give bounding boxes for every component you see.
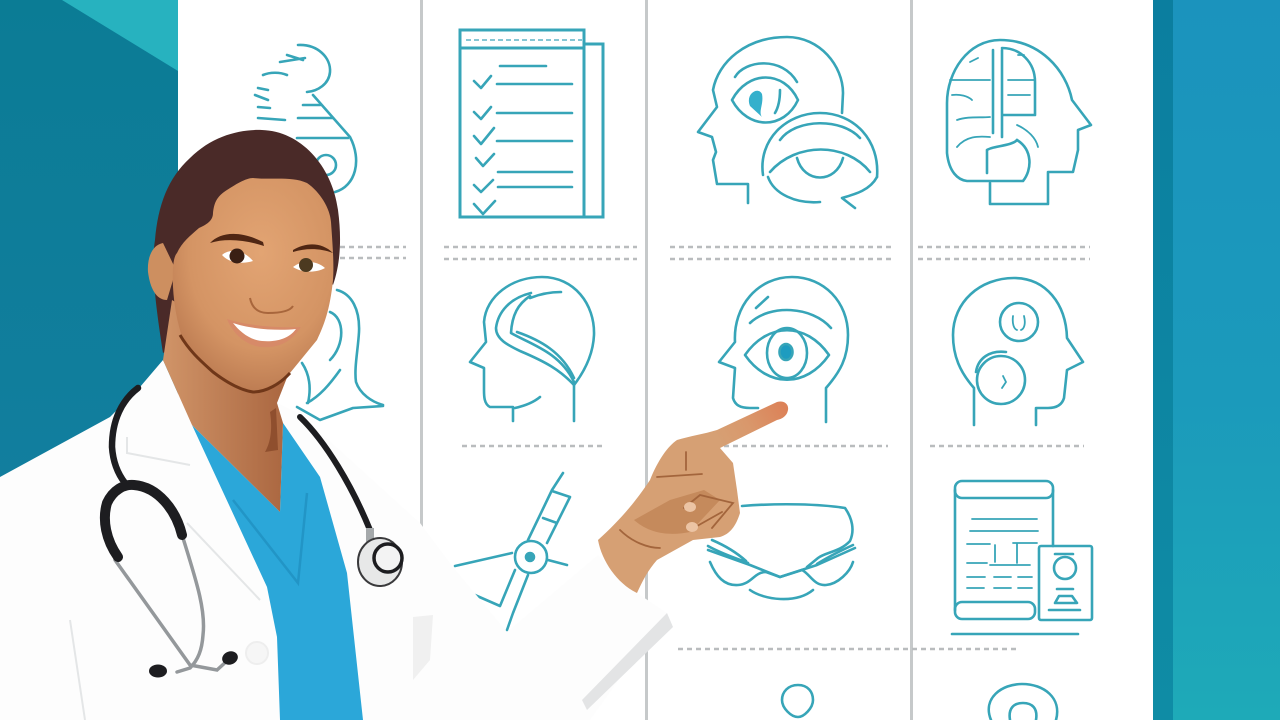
stethoscope tubing [105, 388, 370, 672]
smile [227, 319, 301, 347]
white coat [0, 360, 667, 720]
coat shading [70, 437, 268, 720]
right background panel [1153, 0, 1280, 720]
icon: head with brain cross-section [947, 40, 1091, 204]
neck [163, 300, 290, 512]
doctor illustration [0, 130, 788, 720]
eyes [222, 251, 325, 272]
white chart board [178, 0, 1153, 720]
icon: head profile with hair, behind doctor [297, 290, 383, 420]
hair [153, 130, 340, 353]
eyebrows [210, 234, 333, 253]
hand pointing [598, 401, 788, 593]
neck shadow [265, 408, 278, 452]
icon: checklist document [460, 30, 603, 217]
fingernails [684, 502, 698, 532]
sleeve shadow [413, 615, 433, 680]
icon: partial head circle, bottom centre [782, 685, 813, 717]
scrubs top [192, 423, 363, 720]
icon: head with swirl, top left [255, 45, 356, 192]
sleeve fold [582, 613, 673, 710]
stethoscope chestpiece [358, 528, 402, 586]
icon: report and id card [952, 481, 1092, 634]
icon: eye goggles [708, 504, 855, 599]
left background panel [0, 0, 178, 720]
face [173, 178, 333, 392]
finger creases [620, 452, 733, 548]
jaw shadow [180, 335, 290, 392]
icon: partial head circle, bottom right [989, 684, 1057, 720]
icon: medical instrument [455, 473, 570, 630]
nose [250, 298, 293, 313]
icon: head profile with waves [470, 277, 594, 421]
scrubs neckline [233, 493, 307, 583]
ear [148, 243, 176, 300]
icon: head with eye and lens [698, 37, 877, 208]
stethoscope eartips [149, 649, 240, 678]
icon: head profile with eye [719, 277, 848, 422]
icon: head profile with two circles [953, 278, 1083, 425]
palm shadow [634, 490, 720, 534]
